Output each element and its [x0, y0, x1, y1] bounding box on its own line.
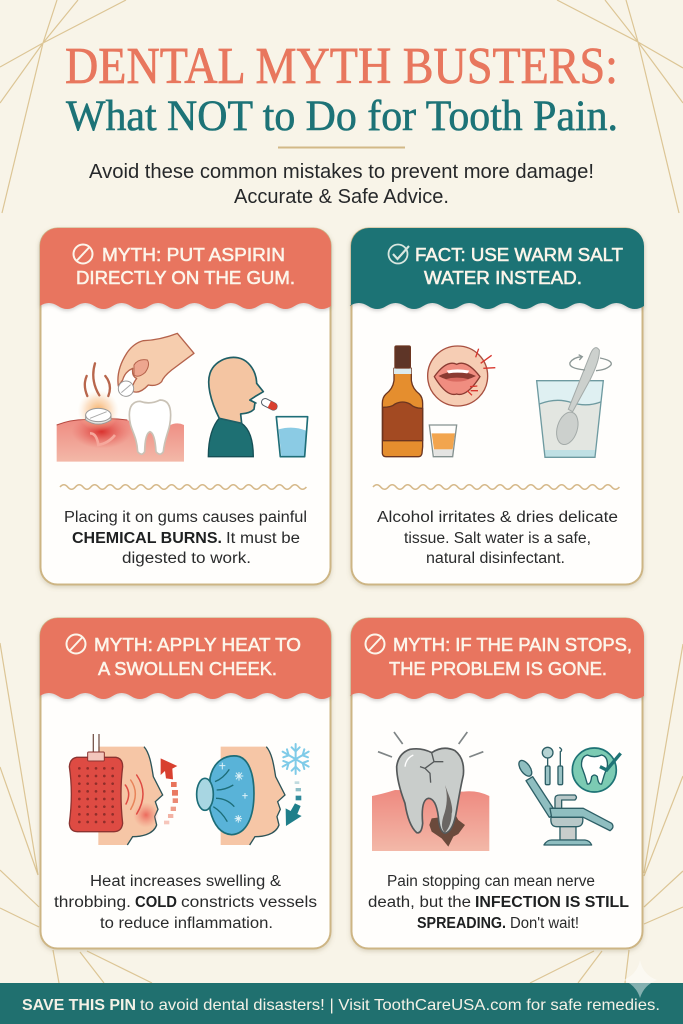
- tablet on gum: [86, 408, 111, 424]
- body text: tissue. Salt water is a safe,: [404, 530, 591, 547]
- salt water glass: [537, 348, 611, 457]
- steam: [85, 363, 110, 396]
- header text: FACT: USE WARM SALT: [415, 244, 623, 265]
- stir arrow: [570, 355, 611, 371]
- dental tools: [542, 747, 563, 785]
- heat waves: [125, 775, 143, 814]
- subtitle: Avoid these common mistakes to prevent more damage!: [89, 161, 594, 183]
- header: myth aspirin: [40, 228, 331, 309]
- icon: prohibited: [74, 244, 92, 264]
- arrow down: cold reduces: [286, 781, 302, 826]
- rays: [378, 732, 483, 757]
- footer text: SAVE THIS PIN: [22, 997, 136, 1014]
- snowflake: [283, 744, 309, 774]
- body text: COLD: [135, 894, 177, 911]
- title divider: [278, 146, 405, 148]
- header text: MYTH: APPLY HEAT TO: [94, 634, 301, 655]
- header text: MYTH: PUT ASPIRIN: [102, 244, 285, 265]
- illustration: heat pack vs cold pack: [69, 734, 309, 845]
- face profile with heat: [98, 747, 163, 845]
- footer banner: [0, 983, 683, 1024]
- gum: [372, 790, 489, 851]
- body text: natural disinfectant.: [426, 550, 565, 567]
- header text: DIRECTLY ON THE GUM.: [76, 267, 295, 288]
- whiskey bottle: [382, 346, 423, 457]
- footer text: to avoid dental disasters! | Visit ToothCareUSA.com for safe remedies.: [140, 997, 660, 1014]
- illustration: dead tooth and dentist: [372, 732, 621, 851]
- dead tooth: [397, 748, 464, 833]
- panel: myth heat: [40, 618, 331, 948]
- icon: prohibited: [66, 634, 86, 654]
- tooth check badge: [572, 748, 621, 792]
- header: myth heat: [40, 618, 331, 699]
- body text: Heat increases swelling &: [90, 873, 282, 890]
- wavy divider: [373, 485, 619, 489]
- header text: A SWOLLEN CHEEK.: [98, 658, 277, 679]
- abscess: [429, 814, 465, 847]
- subtitle: Accurate & Safe Advice.: [234, 186, 449, 208]
- body text: It must be: [226, 530, 300, 547]
- header text: THE PROBLEM IS GONE.: [389, 658, 607, 679]
- panel: fact salt water: [350, 228, 644, 584]
- title line 2: What NOT to Do for Tooth Pain.: [66, 93, 618, 140]
- subtitle: [89, 161, 594, 208]
- hot water bottle: [69, 734, 123, 832]
- icon: check: [388, 244, 409, 264]
- body text: digested to work.: [122, 550, 251, 567]
- body text: CHEMICAL BURNS.: [72, 530, 222, 547]
- illustration: aspirin burn on gum: [57, 333, 308, 462]
- icon: prohibited: [366, 634, 384, 654]
- body text: constricts vessels: [181, 894, 317, 911]
- pill: [260, 397, 278, 411]
- spoon: [553, 348, 599, 447]
- header text: MYTH: IF THE PAIN STOPS,: [393, 634, 632, 655]
- ice pack: [197, 756, 254, 835]
- body text: Alcohol irritates & dries delicate: [377, 509, 618, 526]
- header text: WATER INSTEAD.: [424, 267, 582, 288]
- body text: SPREADING.: [417, 915, 506, 932]
- body text: Placing it on gums causes painful: [64, 509, 307, 526]
- body text: death, but the: [368, 894, 471, 911]
- sparkle: [623, 960, 657, 998]
- panel: myth aspirin: [40, 228, 331, 584]
- dental chair: [516, 758, 613, 845]
- irritated mouth: [428, 346, 495, 406]
- shot glass: [429, 425, 457, 457]
- tablet in hand: [118, 381, 134, 396]
- body text: throbbing.: [54, 894, 131, 911]
- face profile with ice: [221, 747, 285, 845]
- wavy divider: [60, 485, 306, 489]
- person taking pill: [208, 357, 263, 457]
- title line 1: DENTAL MYTH BUSTERS:: [65, 38, 618, 95]
- header: myth pain stops: [350, 618, 644, 699]
- illustration: whiskey vs salt water: [382, 346, 611, 457]
- hand: [118, 333, 194, 392]
- arrow up: swelling increases: [161, 758, 178, 824]
- body text: Don't wait!: [510, 915, 579, 932]
- tooth: [129, 400, 171, 454]
- body text: INFECTION IS STILL: [475, 894, 629, 911]
- header: fact salt water: [350, 228, 644, 309]
- panel: myth pain stops: [350, 618, 644, 948]
- gum and burn: [57, 390, 184, 462]
- body text: Pain stopping can mean nerve: [387, 873, 595, 890]
- glass of water: [276, 417, 308, 457]
- body text: to reduce inflammation.: [100, 915, 273, 932]
